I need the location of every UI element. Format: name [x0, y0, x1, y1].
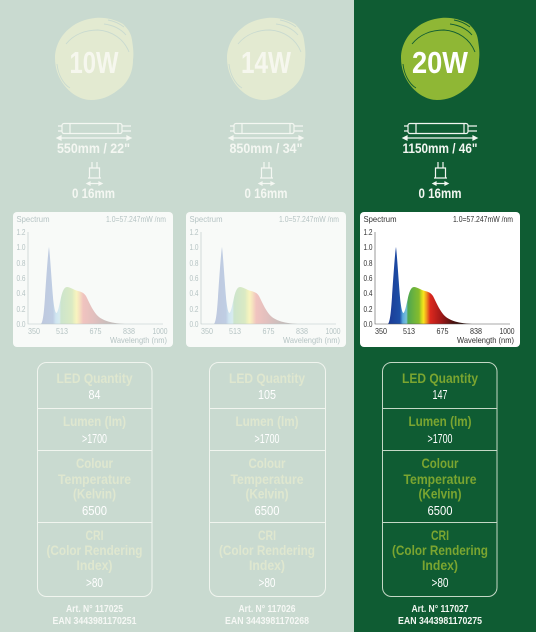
chart axes — [201, 232, 336, 324]
article numbers 14W: Art. N° 117026 — [238, 604, 296, 615]
spectrum curve — [388, 247, 472, 324]
chart labels: 0.2 — [190, 304, 199, 314]
tube diameter: 0 16mm — [418, 185, 462, 201]
chart labels: 675 — [436, 326, 449, 336]
chart labels: 0.8 — [16, 258, 26, 268]
chart labels: 1000 — [152, 326, 168, 336]
tube diameter: 0 16mm — [72, 185, 115, 201]
row: CRI — [392, 527, 488, 590]
row: LED quantity: LED Quantity — [229, 370, 305, 386]
spectrum curve — [214, 247, 298, 324]
chart labels: 838 — [470, 326, 482, 336]
chart labels — [364, 214, 515, 345]
chart labels: 0.8 — [364, 258, 373, 268]
row: lumen: Lumen (lm) — [408, 413, 472, 429]
row: CRI: (Color Rendering — [219, 542, 315, 558]
chart labels: 1.2 — [190, 227, 199, 237]
column: 10W — [13, 18, 173, 627]
row: colour temperature: 6500 — [254, 504, 280, 518]
row: colour temperature: Colour — [248, 455, 286, 471]
chart labels: 0.8 — [190, 258, 199, 268]
row: LED quantity: LED Quantity — [402, 370, 478, 386]
article numbers 10W: EAN 3443981170251 — [52, 616, 137, 627]
article numbers 14W: EAN 3443981170268 — [225, 616, 309, 627]
chart axes — [375, 232, 510, 324]
row: lumen: >1700 — [428, 432, 453, 446]
row: CRI — [219, 527, 315, 590]
chart labels: 0.6 — [16, 273, 26, 283]
row: CRI: CRI — [431, 527, 449, 543]
badge: 10W — [55, 18, 133, 100]
chart labels: 0.4 — [364, 288, 373, 298]
chart labels: 1000 — [500, 326, 515, 336]
chart labels: 350 — [28, 326, 40, 336]
row: LED quantity — [56, 370, 133, 402]
chart labels: 513 — [56, 326, 68, 336]
tube diameter: 0 16mm — [244, 185, 288, 201]
row: colour temperature: Temperature — [230, 471, 304, 487]
chart labels: 675 — [262, 326, 275, 336]
tube length: 550mm / 22" — [57, 140, 130, 156]
chart labels: 0.0 — [16, 319, 26, 329]
pin icon — [87, 162, 102, 185]
spectrum curve — [41, 247, 125, 324]
chart labels: 1.0 — [16, 242, 26, 252]
chart labels: 1.2 — [16, 227, 26, 237]
row: colour temperature: Temperature — [58, 471, 131, 487]
tube length: 850mm / 34" — [230, 140, 302, 156]
row: lumen — [408, 413, 472, 446]
row: colour temperature: Colour — [76, 455, 113, 471]
spec table 14W — [210, 362, 326, 596]
chart labels: 0.2 — [364, 304, 373, 314]
chart labels: Spectrum — [190, 214, 222, 224]
chart labels: 513 — [403, 326, 415, 336]
row: colour temperature: Colour — [422, 455, 459, 471]
chart labels: 350 — [375, 326, 387, 336]
chart labels — [16, 214, 168, 345]
article numbers 20W — [398, 604, 482, 627]
row: lumen — [63, 413, 126, 446]
spec table 10W — [38, 362, 152, 596]
panel: spectrum chart 10W — [13, 212, 173, 347]
background: highlighted column — [354, 0, 536, 632]
row: lumen: Lumen (lm) — [236, 413, 298, 429]
row: CRI: >80 — [86, 576, 103, 590]
row: CRI — [46, 527, 142, 590]
chart axes — [28, 232, 163, 324]
row: lumen — [236, 413, 298, 446]
row: colour temperature — [404, 455, 477, 518]
chart labels: 838 — [123, 326, 135, 336]
row: CRI: (Color Rendering — [46, 542, 142, 558]
badge label: 10W — [70, 45, 119, 80]
panel: spectrum chart 20W — [360, 212, 520, 347]
chart labels: 1.0=57.247mW /nm — [279, 214, 339, 224]
badge: 14W — [227, 18, 305, 100]
chart labels: 0.0 — [190, 319, 199, 329]
badge: 20W — [401, 18, 479, 100]
panel: spectrum chart 14W — [186, 212, 346, 347]
row: LED quantity — [402, 370, 478, 402]
chart labels: 0.6 — [364, 273, 373, 283]
pin icon — [259, 162, 274, 185]
article numbers 10W — [52, 604, 137, 627]
article numbers 20W: Art. N° 117027 — [412, 604, 469, 615]
chart labels: 1.0=57.247mW /nm — [453, 214, 513, 224]
chart labels: 0.2 — [16, 304, 26, 314]
row: LED quantity: 105 — [258, 388, 276, 402]
chart labels: 1.0 — [364, 242, 373, 252]
chart labels: 675 — [90, 326, 102, 336]
spec table 20W — [382, 362, 497, 596]
row: colour temperature: 6500 — [428, 504, 453, 518]
article numbers 14W — [225, 604, 309, 627]
row: colour temperature: (Kelvin) — [418, 486, 462, 502]
row: lumen: Lumen (lm) — [63, 413, 126, 429]
tube length: 1150mm / 46" — [402, 140, 478, 156]
chart labels: 838 — [296, 326, 308, 336]
row: LED quantity: LED Quantity — [56, 370, 133, 386]
row: CRI: CRI — [258, 527, 276, 543]
chart labels: 513 — [229, 326, 241, 336]
chart labels: 0.4 — [16, 288, 26, 298]
row: CRI: CRI — [86, 527, 104, 543]
row: LED quantity: 147 — [432, 388, 448, 402]
row: LED quantity: 84 — [88, 388, 101, 402]
chart labels: 350 — [201, 326, 213, 336]
chart labels: 1.0=57.247mW /nm — [106, 214, 166, 224]
chart labels: Spectrum — [16, 214, 50, 224]
row: colour temperature: Temperature — [404, 471, 477, 487]
row: colour temperature: (Kelvin) — [73, 486, 116, 502]
row: LED quantity — [229, 370, 305, 402]
tube icon — [403, 124, 477, 140]
badge label: 20W — [412, 45, 469, 80]
chart labels: 0.0 — [364, 319, 373, 329]
row: colour temperature: (Kelvin) — [246, 486, 288, 502]
row: CRI: >80 — [258, 576, 276, 590]
column: 14W — [186, 18, 346, 627]
chart labels: Wavelength (nm) — [110, 335, 167, 345]
chart labels: Spectrum — [364, 214, 396, 224]
row: CRI: (Color Rendering — [392, 542, 488, 558]
chart labels: Wavelength (nm) — [283, 335, 340, 345]
row: colour temperature — [230, 455, 304, 518]
tube icon — [57, 124, 131, 140]
chart labels: 0.6 — [190, 273, 199, 283]
chart labels: 1.2 — [364, 227, 373, 237]
row: CRI: >80 — [432, 576, 449, 590]
background: light columns — [0, 0, 354, 632]
article numbers 20W: EAN 3443981170275 — [398, 616, 482, 627]
row: lumen: >1700 — [254, 432, 280, 446]
pin icon — [433, 162, 448, 185]
row: colour temperature: 6500 — [82, 504, 107, 518]
row: lumen: >1700 — [82, 432, 107, 446]
article numbers 10W: Art. N° 117025 — [66, 604, 123, 615]
chart labels: 1000 — [326, 326, 341, 336]
column: 20W — [360, 18, 520, 627]
row: CRI: Index) — [76, 557, 112, 573]
chart labels: 0.4 — [190, 288, 199, 298]
row: CRI: Index) — [249, 557, 285, 573]
tube icon — [229, 124, 303, 140]
badge label: 14W — [241, 45, 292, 80]
chart labels — [190, 214, 341, 345]
row: colour temperature — [58, 455, 131, 518]
chart labels: Wavelength (nm) — [457, 335, 514, 345]
chart labels: 1.0 — [190, 242, 199, 252]
row: CRI: Index) — [422, 557, 458, 573]
